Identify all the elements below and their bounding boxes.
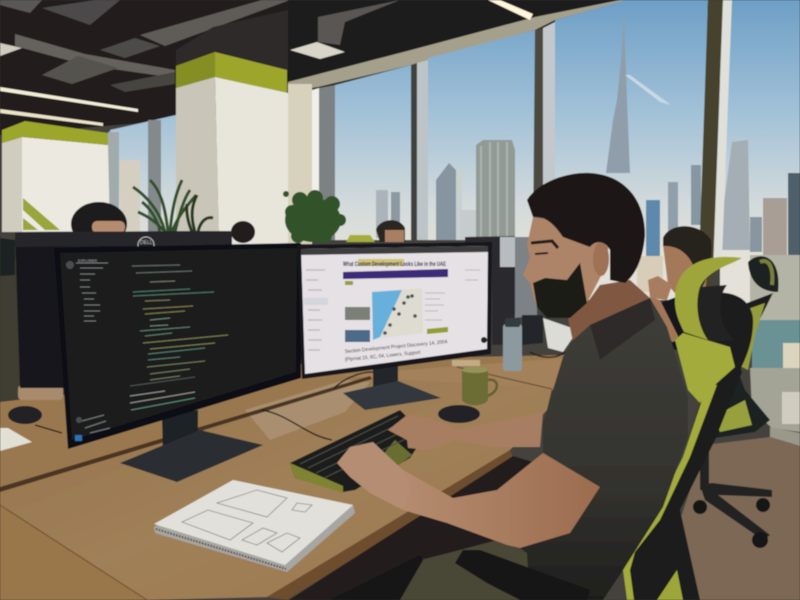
polo shirt xyxy=(520,298,688,600)
background man at right xyxy=(648,226,735,350)
hair xyxy=(527,173,645,283)
trousers xyxy=(400,540,550,600)
desk items: olive mug xyxy=(462,367,497,405)
background area behind desks xyxy=(0,240,60,420)
code lines xyxy=(76,263,228,433)
back chair xyxy=(693,256,778,548)
left code monitor: EXPLORER xyxy=(78,259,98,263)
face xyxy=(523,217,610,307)
near desk xyxy=(0,505,147,600)
ceiling lights and vents xyxy=(0,0,533,126)
eye xyxy=(535,253,548,254)
far forearm xyxy=(388,412,543,450)
far desk xyxy=(0,355,565,490)
stand: right monitor xyxy=(343,362,441,410)
left background pillar xyxy=(2,121,110,234)
dark leg xyxy=(330,555,423,600)
potted plant: palm xyxy=(133,180,213,232)
near hand xyxy=(337,442,410,510)
main white pillar with green band xyxy=(176,10,312,245)
heading highlight xyxy=(358,259,404,266)
right browser monitor xyxy=(297,242,492,379)
developer xyxy=(330,173,688,600)
back right monitors xyxy=(465,236,578,352)
sidebar xyxy=(306,270,325,350)
back monitor: DELL xyxy=(140,240,153,246)
stand: left monitor xyxy=(120,410,263,482)
cables xyxy=(35,352,565,440)
eyebrow xyxy=(531,241,558,248)
paper xyxy=(0,428,32,451)
dark space under desk xyxy=(289,456,560,600)
right column xyxy=(425,270,480,320)
notebook xyxy=(154,480,355,572)
neck xyxy=(568,280,650,342)
left code monitor xyxy=(54,243,301,449)
main desk xyxy=(0,378,552,600)
page subheading: Section Development Project Discovery 14, 2004 xyxy=(345,339,448,355)
ear xyxy=(593,242,609,276)
thumbnails xyxy=(345,307,370,320)
right browser monitor: (Pipmat 15, 6C, 04, Lowers, Support xyxy=(345,350,421,363)
floor xyxy=(680,437,800,600)
desk seams xyxy=(0,367,552,600)
skyline buildings xyxy=(120,13,800,432)
potted plant: leafy xyxy=(283,190,346,243)
back monitor xyxy=(0,231,232,388)
desk front edge xyxy=(267,450,513,600)
keyboard xyxy=(290,410,425,493)
left mouse xyxy=(8,406,42,424)
background people xyxy=(71,202,405,246)
right mouse xyxy=(438,405,480,423)
beard xyxy=(533,263,587,318)
armrest xyxy=(455,550,590,600)
city window panes xyxy=(110,0,800,330)
page heading: What Custom Development Looks Like in the UAE xyxy=(343,262,446,268)
purple banner xyxy=(343,269,448,279)
near arm xyxy=(403,453,600,548)
window frames xyxy=(108,0,800,446)
main chair xyxy=(623,257,753,600)
desk items: water bottle xyxy=(503,318,522,371)
coaster xyxy=(452,360,480,366)
map xyxy=(372,288,423,340)
